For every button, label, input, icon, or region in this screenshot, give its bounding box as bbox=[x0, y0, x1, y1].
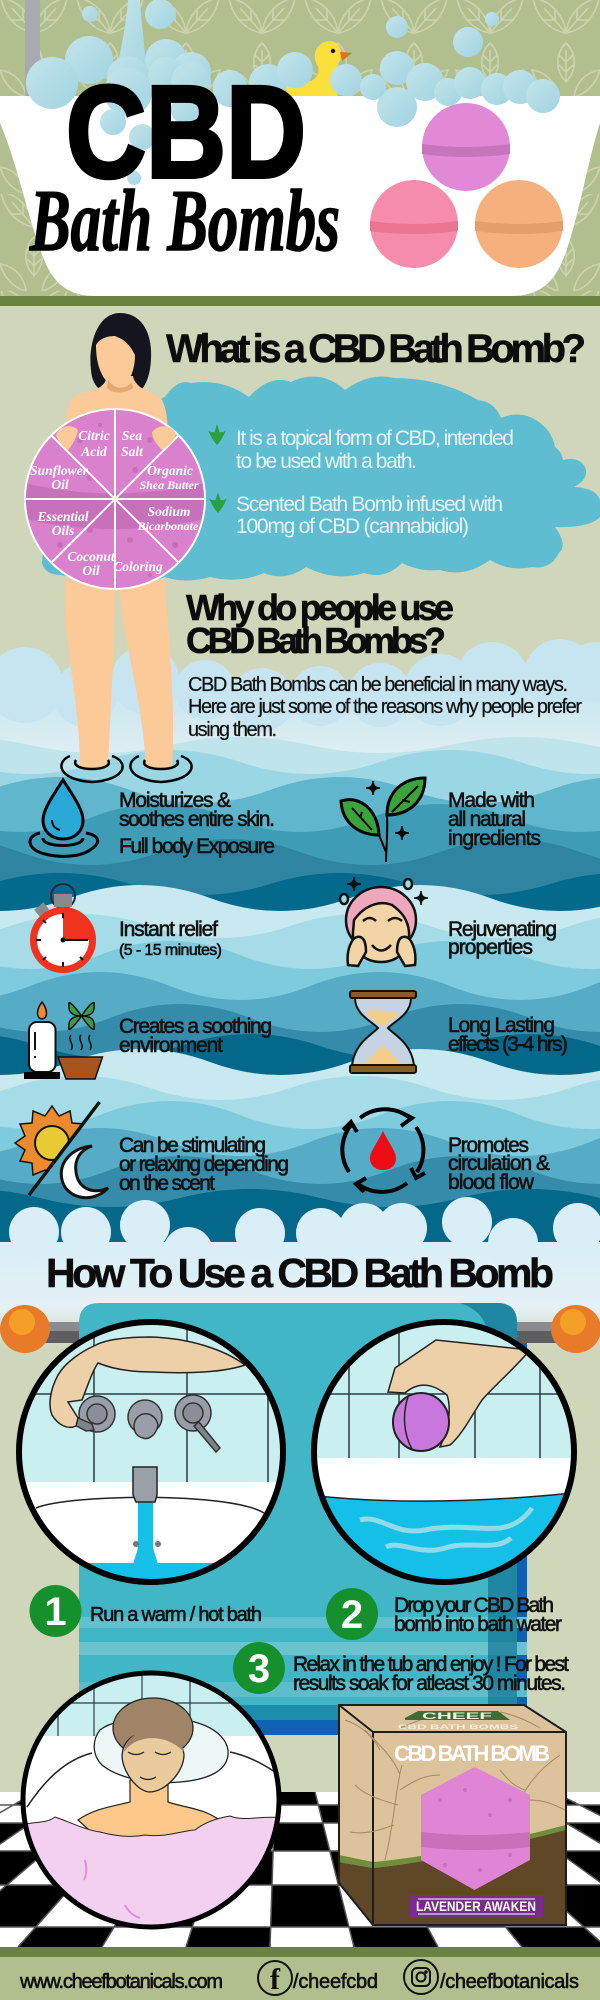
wheel labels bbox=[30, 428, 199, 578]
icon: circulation bbox=[342, 1109, 425, 1192]
face bbox=[96, 336, 135, 388]
wheel labels: Coloring bbox=[113, 559, 163, 574]
neck and shoulders bbox=[78, 1780, 222, 1840]
item: moisturizes bbox=[30, 780, 275, 858]
intro paragraph: CBD Bath Bombs can be beneficial in many ways. bbox=[188, 674, 568, 696]
number badge: 2 bbox=[341, 1593, 363, 1637]
step 3 bbox=[233, 1642, 569, 1695]
icons: three bath bombs bbox=[370, 103, 563, 268]
label bbox=[119, 789, 275, 858]
hexagon bath bomb bbox=[421, 1767, 530, 1890]
step text: Relax in the tub and enjoy ! For best bbox=[293, 1653, 569, 1676]
rubber duck bbox=[286, 41, 352, 96]
icon: green arrow bbox=[209, 492, 227, 513]
label: (5 - 15 minutes) bbox=[119, 942, 222, 959]
floor tiles bbox=[0, 1792, 600, 1947]
bath bomb bbox=[393, 1393, 449, 1451]
header divider band bbox=[0, 296, 600, 306]
panel: step 1 illustration bbox=[16, 1319, 286, 1585]
step text: Run a warm / hot bath bbox=[90, 1604, 262, 1626]
foam band behind the why section bbox=[0, 639, 600, 770]
item: long lasting bbox=[350, 991, 568, 1073]
wheel labels: Sea bbox=[122, 428, 142, 443]
label bbox=[119, 1134, 289, 1195]
hair back bbox=[90, 313, 151, 392]
number badge: 1 bbox=[44, 1590, 67, 1634]
towel rail bbox=[0, 1305, 600, 1353]
label: Can be stimulating bbox=[119, 1134, 266, 1157]
hair bbox=[112, 1697, 194, 1748]
facebook handle: /cheefcbd bbox=[293, 1971, 378, 1993]
rail knob right bbox=[551, 1305, 600, 1353]
label: effects (3-4 hrs) bbox=[448, 1033, 568, 1056]
label bbox=[448, 789, 541, 850]
orange bomb bbox=[475, 180, 563, 268]
label: Rejuvenating bbox=[448, 918, 557, 941]
hand bbox=[388, 1340, 530, 1447]
icon: instagram bbox=[404, 1960, 438, 1994]
item: instant relief bbox=[34, 884, 222, 970]
step text: Drop your CBD Bath bbox=[394, 1594, 554, 1617]
icon: facebook bbox=[258, 1961, 292, 1996]
bullet 2: 100mg of CBD (cannabidiol) bbox=[236, 515, 469, 538]
label: properties bbox=[448, 936, 533, 959]
label: or relaxing depending bbox=[119, 1153, 289, 1176]
icon: candle and incense bbox=[24, 1002, 102, 1079]
label bbox=[448, 1134, 550, 1194]
wheel labels: Oils bbox=[52, 523, 74, 538]
panel: blue cloud bbox=[42, 376, 600, 583]
icon: spa face bbox=[340, 877, 428, 966]
tub body bbox=[0, 96, 600, 296]
heading: Why do people use: Why do people use bbox=[186, 587, 454, 628]
rail knob left bbox=[0, 1305, 50, 1353]
step text bbox=[293, 1653, 569, 1695]
lid logo: CHEEF bbox=[422, 1711, 493, 1721]
cloud text block bbox=[208, 424, 514, 538]
intro paragraph bbox=[188, 674, 582, 741]
ingredient wheel bbox=[20, 409, 210, 589]
item: natural bbox=[341, 778, 541, 862]
flavour label: LAVENDER AWAKEN bbox=[416, 1898, 536, 1914]
title: Bath Bombs: Bath Bombs bbox=[29, 173, 340, 270]
box faces bbox=[339, 1705, 566, 1925]
item: soothing environment bbox=[24, 1002, 272, 1079]
faucet pipe bbox=[25, 0, 40, 96]
pillow bbox=[94, 1719, 228, 1783]
intro paragraph: Here are just some of the reasons why people prefer bbox=[188, 696, 582, 718]
label: all natural bbox=[448, 808, 526, 831]
number badge: 3 bbox=[248, 1647, 270, 1691]
step text: results soak for atleast 30 minutes. bbox=[293, 1672, 566, 1695]
flavour label bbox=[410, 1895, 543, 1918]
step 1 bbox=[30, 1585, 262, 1637]
label: soothes entire skin. bbox=[119, 808, 275, 831]
heading: Why do people use bbox=[186, 587, 454, 661]
label: environment bbox=[119, 1034, 223, 1057]
website: www.cheefbotanicals.com bbox=[19, 1971, 223, 1993]
wheel labels: Citric bbox=[78, 428, 110, 443]
number badge bbox=[233, 1642, 285, 1694]
woman figure bbox=[20, 313, 210, 782]
bullet 1 bbox=[236, 427, 514, 473]
number badge bbox=[30, 1585, 82, 1637]
step 2 bbox=[326, 1588, 562, 1640]
label bbox=[119, 1015, 272, 1057]
label: Moisturizes & bbox=[119, 789, 231, 812]
torso and shoulders bbox=[65, 376, 168, 440]
bullet 2: Scented Bath Bomb infused with bbox=[236, 493, 503, 516]
bullet 1: to be used with a bath. bbox=[236, 450, 417, 473]
product box bbox=[339, 1705, 566, 1925]
water ripples at feet bbox=[61, 756, 192, 782]
pink bomb bbox=[370, 180, 458, 268]
item: stimulating or relaxing bbox=[15, 1102, 289, 1198]
hair fringe bbox=[98, 318, 143, 355]
wheel labels: Oil bbox=[82, 563, 100, 578]
wheel labels: Shea Butter bbox=[139, 478, 199, 492]
wheel labels: Acid bbox=[80, 444, 107, 459]
legs bbox=[65, 580, 173, 768]
wheel labels: Organic bbox=[147, 463, 193, 478]
wheel labels: Bicarbonate bbox=[137, 519, 199, 533]
wheel labels: Coconut bbox=[67, 549, 116, 564]
towel bbox=[79, 1303, 527, 1735]
icon: green arrow bbox=[208, 424, 226, 445]
instagram handle: /cheefbotanicals bbox=[440, 1971, 579, 1993]
footer bbox=[0, 1947, 600, 2000]
intro paragraph: using them. bbox=[188, 719, 277, 741]
hands bbox=[56, 426, 176, 450]
rising water column bbox=[112, 0, 150, 96]
icon: water drop bbox=[30, 780, 98, 856]
icon: stopwatch bbox=[34, 884, 92, 970]
heading: How To Use: How To Use a CBD Bath Bomb bbox=[46, 1250, 554, 1296]
header: bathtub scene bbox=[0, 0, 600, 296]
foam bubbles bbox=[26, 0, 499, 109]
heading: What is a CBD Bath Bomb: What is a CBD Bath Bomb? bbox=[166, 327, 586, 371]
icon: sun and moon bbox=[15, 1102, 108, 1198]
panel: step 2 illustration bbox=[311, 1319, 577, 1585]
foam bubbles over the tub rim bbox=[26, 57, 560, 185]
lid logo: CBD BATH BOMBS bbox=[398, 1724, 519, 1731]
wheel labels: Essential bbox=[36, 509, 89, 524]
hemp leaf sketches bbox=[345, 1712, 565, 1860]
panel: step 3 illustration bbox=[20, 1670, 282, 1930]
neck shadow bbox=[107, 380, 133, 392]
label bbox=[448, 1014, 568, 1056]
step text: bomb into bath water bbox=[394, 1613, 562, 1636]
label bbox=[119, 918, 222, 959]
bullet 1: It is a topical form of CBD, intended bbox=[236, 427, 514, 450]
icon: hourglass bbox=[350, 991, 416, 1073]
label: circulation & bbox=[448, 1152, 550, 1175]
label: ingredients bbox=[448, 827, 541, 850]
arm bbox=[50, 1337, 245, 1427]
item: circulation bbox=[342, 1109, 550, 1194]
icon: leaves bbox=[341, 778, 425, 862]
label: Made with bbox=[448, 789, 535, 812]
wheel labels: Sunflower bbox=[30, 463, 89, 478]
face bbox=[122, 1732, 184, 1792]
label: Instant relief bbox=[119, 918, 218, 941]
foam band above how-to section bbox=[0, 1197, 600, 1350]
purple bomb bbox=[422, 103, 510, 191]
heading: Why do people use: CBD Bath Bombs? bbox=[186, 620, 446, 661]
icon: facebook: f bbox=[270, 1963, 281, 1996]
label: blood flow bbox=[448, 1171, 535, 1194]
pink foam bbox=[28, 1816, 276, 1924]
title: CBD: CBD bbox=[66, 58, 306, 205]
label: Long Lasting bbox=[448, 1014, 555, 1037]
step text bbox=[394, 1594, 562, 1636]
wave background bbox=[0, 737, 600, 1300]
label bbox=[448, 918, 557, 959]
wheel labels: Salt bbox=[121, 444, 144, 459]
label: Promotes bbox=[448, 1134, 529, 1157]
item: rejuvenating bbox=[340, 877, 557, 966]
lid logo bbox=[398, 1711, 519, 1731]
handles bbox=[58, 1395, 220, 1452]
label: Creates a soothing bbox=[119, 1015, 272, 1038]
bullet 2 bbox=[236, 493, 503, 538]
label: on the scent bbox=[119, 1172, 215, 1195]
number badge bbox=[326, 1588, 378, 1640]
wheel labels: Oil bbox=[51, 477, 69, 492]
box title: CBD BATH BOMB bbox=[394, 1741, 550, 1766]
wheel labels: Sodium bbox=[148, 504, 190, 519]
label: Full body Exposure bbox=[119, 835, 275, 858]
